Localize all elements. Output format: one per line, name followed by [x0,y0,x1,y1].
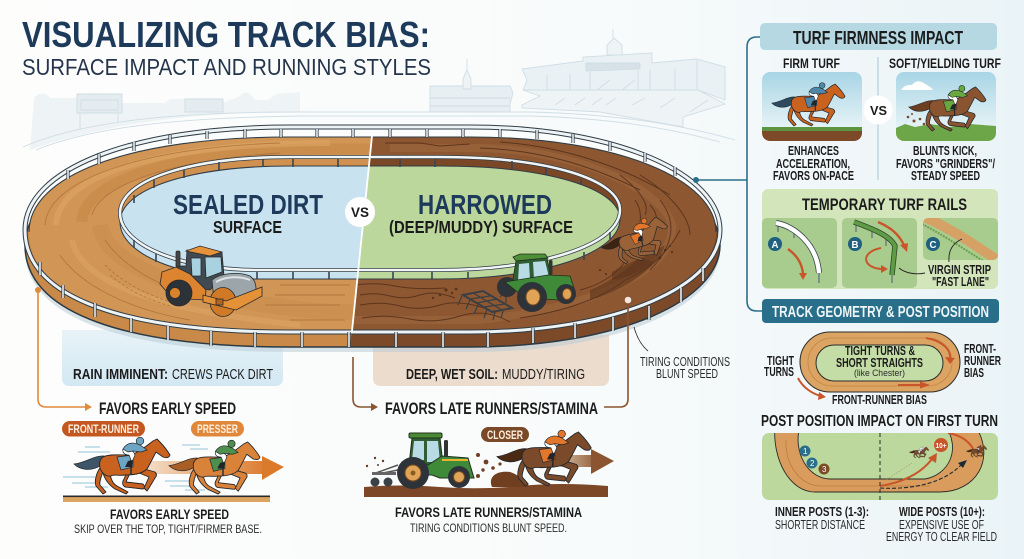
panel: rain imminent: CREWS PACK DIRT [172,366,273,383]
callout: tiring conditions: TIRING CONDITIONS [640,355,730,369]
panel: track geometry [761,299,1001,544]
oval text [836,344,923,378]
firm turf text [773,144,854,183]
mud splash [476,453,530,487]
panel: turf firmness [760,23,1001,183]
infield [120,157,620,279]
header [762,299,999,323]
panel: rain imminent [62,330,283,386]
caption: FAVORS EARLY SPEED [110,506,229,522]
rail diagram C: C [930,240,936,251]
pill: front-runner [62,421,145,436]
panel: temporary turf rails [762,189,1000,289]
vs badge: VS [870,103,887,118]
section: favors late runners [364,400,614,535]
rail diagram B: B [852,240,858,251]
vs badge [864,96,892,124]
post 2 [806,458,818,468]
rail diagram C [923,218,998,260]
title: VISUALIZING TRACK BIAS: [22,14,430,55]
heading: TEMPORARY TURF RAILS [802,195,967,214]
ground [364,484,608,497]
soft turf text: STEADY SPEED [911,169,980,183]
sub caption: SKIP OVER THE TOP, TIGHT/FIRMER BASE. [74,522,262,536]
icon: tractor [366,433,474,489]
divider [877,57,879,180]
small oval track [800,332,960,392]
rail diagram B [842,218,917,288]
label: harrowed: HARROWED [418,189,552,220]
label: sealed dirt: SEALED DIRT [173,189,323,220]
sub caption: TIRING CONDITIONS BLUNT SPEED. [410,521,567,535]
wide posts text: EXPENSIVE USE OF [899,517,984,532]
label: deep muddy surface: (DEEP/MUDDY) SURFACE [389,217,573,237]
soft turf text: BLUNTS KICK, [913,144,977,158]
oval text: TIGHT TURNS & [845,344,915,358]
inner posts text [775,504,869,532]
image: firm turf horse [762,72,862,141]
label: firm turf: FIRM TURF [783,55,840,71]
inner posts text: INNER POSTS (1-3): [775,504,869,519]
wide posts text: WIDE POSTS (10+): [899,504,985,519]
ground [63,496,270,502]
track oval [25,127,720,352]
title [22,14,431,80]
post 1 [800,446,810,456]
arrow: tight turns [798,378,826,400]
panel: deep wet soil: MUDDY/TIRING [502,366,585,383]
firm turf text: ENHANCES [788,144,839,158]
horse: presser [169,440,260,494]
icon: green tractor with harrow [432,254,576,320]
vs badge [345,197,375,227]
label: front-runner bias right: FRONT- [964,342,996,356]
post 3: 3 [822,465,827,474]
connector: sealed to early speed [35,287,92,411]
pill: front-runner: FRONT-RUNNER [68,424,140,436]
heading: FAVORS EARLY SPEED [99,400,236,418]
inner posts text: SHORTER DISTANCE [775,517,865,532]
firm turf text: ACCELERATION, [776,157,850,171]
virgin strip label: VIRGIN STRIP [928,263,991,277]
grandstand sketch [23,29,735,150]
label: surface: SURFACE [213,217,282,237]
label: front-runner bias right: BIAS [964,366,984,380]
panel: deep wet soil: DEEP, WET SOIL: [406,366,498,383]
post 10+: 10+ [936,441,947,450]
firm turf text: FAVORS ON-PACE [773,169,854,183]
post position diagram [762,433,998,500]
header [760,23,997,50]
panel: deep wet soil [373,335,609,386]
soft turf text [896,144,995,183]
post 1: 1 [803,447,808,456]
panel: rain imminent: RAIN IMMINENT: [73,366,168,383]
icon: horse on track [597,214,673,280]
oval text: SHORT STRAIGHTS [836,356,923,370]
arrow [560,449,614,474]
label: front-runner bias: FRONT-RUNNER BIAS [832,393,927,407]
divider: surface split [352,136,372,331]
virgin strip label: "FAST LANE" [932,275,989,289]
heading: FAVORS LATE RUNNERS/STAMINA [385,400,598,418]
caption: FAVORS LATE RUNNERS/STAMINA [395,504,582,520]
horse: outside [966,445,987,457]
oval text: (like Chester) [854,368,905,378]
rail diagram A [762,218,837,288]
horse: front-runner [74,437,170,494]
connector: harrowed to late runners [353,296,632,411]
vs badge: VS [351,205,369,220]
icon: road roller [160,246,262,316]
pill: closer [481,427,529,442]
section: favors early speed [62,400,284,536]
pill: closer: CLOSER [487,430,524,442]
post 3 [818,464,830,474]
connector: right column [693,37,764,311]
image: soft turf horse [896,72,996,141]
label: tight turns: TURNS [764,365,794,379]
horse: closer [497,430,591,486]
post 2: 2 [810,459,815,468]
callout: tiring conditions [634,327,730,381]
label: tight turns [764,354,794,379]
label: tight turns: TIGHT [767,354,794,368]
rail diagram A: A [772,240,778,251]
speed lines [63,445,208,490]
header: TURF FIRMNESS IMPACT [793,28,963,48]
label: front-runner bias right [964,342,1001,380]
horse: wide [909,446,929,458]
virgin strip label [928,263,991,289]
wide posts text [886,504,997,544]
title: SURFACE IMPACT AND RUNNING STYLES [22,54,431,80]
post 10+ [934,438,948,452]
pointers [899,239,962,274]
pill: presser [191,421,244,436]
pill: presser: PRESSER [197,424,239,436]
callout: tiring conditions: BLUNT SPEED [656,367,718,381]
label: front-runner bias right: RUNNER [964,354,1001,368]
arrow [148,456,284,480]
